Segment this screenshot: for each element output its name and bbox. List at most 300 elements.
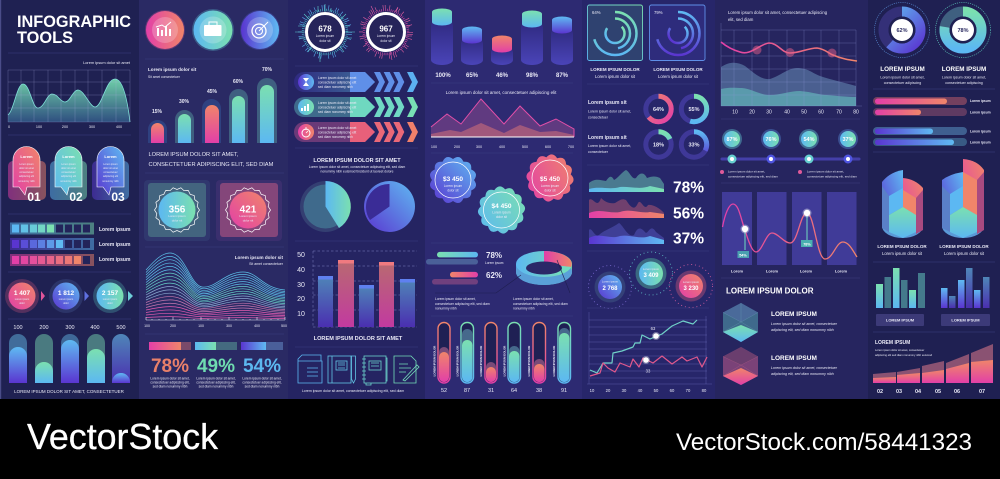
area chart: 0 (8, 125, 10, 129)
text block: LOREM IPSUM DOLOR SIT AMET, (148, 152, 239, 158)
donut captions: consectetuer adipiscing (884, 81, 921, 85)
circle stat 2 768: Lorem ipsum (602, 280, 619, 284)
donut captions: Lorem ipsum dolor sit amet, (880, 76, 925, 80)
legend: consectetuer adipiscing elit, sed diam (807, 174, 857, 178)
mountain chart: 400 (499, 145, 505, 149)
line chart: 20 (606, 388, 611, 393)
cylinder captions: Lorem ipsum dolor sit (944, 251, 985, 256)
capsule bar chart with percentages: 30% (179, 99, 190, 105)
capsule bar chart with percentages (148, 67, 277, 143)
thermometer tubes: LOREM IPSUM DOLOR (479, 346, 483, 376)
grid area chart: 30 (766, 110, 772, 116)
section heading: Lorem ipsum dolor sit amet, consectetuer adipiscing elit, sed diam (309, 165, 405, 169)
donut text top: consectetuer (588, 116, 609, 120)
text block one: adipiscing elit, sed diam nonummy nibh (771, 328, 834, 332)
capsule bar chart with percentages: Sit amet consectetuer (148, 75, 181, 79)
arc card captions (590, 67, 703, 79)
badge $3 450: $3 450 (443, 176, 463, 183)
callout 03: consectetuer (103, 171, 118, 174)
hexagon cube pink (723, 347, 758, 385)
column curve chart: Lorem (766, 268, 779, 274)
icon: briefcase (192, 9, 234, 51)
callout 01: 01 (27, 190, 41, 204)
capsule bar chart with percentages: 70% (262, 67, 273, 73)
text block two: Lorem ipsum dolor sit amet, consectetuer (771, 366, 838, 370)
callout 03: nonummy nibh (102, 180, 119, 183)
capsule bars: 500 (116, 325, 126, 331)
radial counter 967: dolor sit (380, 39, 392, 43)
callout 03: 03 (111, 190, 125, 204)
donut captions: consectetuer adipiscing (945, 81, 983, 85)
callout 02: Lorem (62, 154, 75, 159)
arrow row: chart: consectetuer adipiscing elit (318, 106, 356, 110)
thermometer tubes: 91 (561, 388, 567, 394)
horizontal progress bars: Lorem ipsum (970, 140, 991, 144)
wave line chart: Sit amet consectetuer (249, 262, 284, 266)
panel: column four (425, 0, 582, 399)
mini area 56%: 56% (673, 206, 704, 222)
mini bars right (941, 268, 990, 326)
circle counters: 1 812 (58, 290, 75, 297)
icon: document and pen (394, 356, 419, 383)
radial counter 678: 678 (318, 24, 332, 34)
callout 01: adipiscing elit (19, 175, 34, 178)
thermometer tubes: 38 (536, 388, 542, 394)
card 356: dolor sit (172, 218, 182, 222)
mini area 78% (589, 170, 704, 196)
callout 01: Lorem ipsum (19, 163, 34, 166)
stepped area chart (873, 340, 993, 395)
text block (148, 152, 274, 168)
wave line chart: 400 (254, 324, 260, 328)
circle stat 3 409 (630, 252, 672, 295)
card 421: dolor sit (243, 218, 253, 222)
radial counter 967 (361, 6, 412, 60)
capsule bars: 300 (65, 325, 75, 331)
line chart: 10 (590, 388, 595, 393)
circle counters: 1 407 (14, 290, 31, 297)
mountain chart: Lorem ipsum dolor sit amet, consectetuer adipiscing elit (446, 90, 557, 95)
donut 64%: 64% (653, 107, 664, 113)
column curve chart: 54% (739, 253, 747, 257)
radial counter 678 (295, 4, 355, 62)
circle stat 3 230 (670, 264, 712, 308)
mountain chart: 600 (545, 145, 551, 149)
line chart: 63 (651, 326, 656, 331)
capsule bar chart with percentages: 15% (152, 109, 163, 115)
legend: Lorem ipsum dolor sit amet, (728, 170, 765, 174)
stepped area chart: Lorem ipsum dolor sit amet, consectetuer (875, 348, 924, 352)
ring captions: Lorem ipsum dolor sit amet, (513, 297, 554, 301)
ring captions: nonummy nibh (513, 306, 535, 310)
mountain chart: 200 (454, 145, 460, 149)
legend: Lorem ipsum dolor sit amet, (807, 170, 844, 174)
mountain chart (431, 90, 574, 149)
stat 78%: Lorem ipsum dolor sit amet, (150, 376, 190, 380)
panel: column five (582, 0, 715, 399)
capsule bars (9, 325, 130, 394)
panel: column seven (868, 0, 1000, 399)
badge $4 450: dolor sit (496, 215, 507, 219)
stat 78%: consectetuer adipiscing elit, (150, 380, 190, 384)
arc card 79%: 79% (654, 10, 663, 15)
wave line chart: 200 (170, 324, 176, 328)
bar chart: 10 (297, 311, 305, 318)
callout 02: dolor sit amet (61, 167, 76, 170)
mountain chart: 500 (522, 145, 528, 149)
badge $3 450: dolor sit (447, 188, 459, 192)
grid area chart: Lorem ipsum dolor sit amet, consectetuer adipiscing (728, 10, 828, 15)
cylinders chart: 46% (496, 73, 509, 79)
radial counter 678: dolor sit (319, 39, 331, 43)
bar chart: 30 (297, 282, 305, 289)
segmented level bars: Lorem ipsum (99, 257, 131, 263)
arrow row: chart: sed diam nonummy nibh (318, 110, 353, 114)
donut text top: Lorem ipsum sit (588, 100, 627, 106)
grid area chart: 20 (749, 110, 755, 116)
donut 62% (874, 2, 930, 58)
cylinders chart: 65% (466, 73, 479, 79)
section heading: LOREM IPSUM DOLOR SIT AMET (313, 158, 401, 164)
callout 02: nonummy nibh (60, 180, 77, 183)
donut text top: Lorem ipsum dolor sit amet, (588, 110, 631, 114)
column curve chart: Lorem (835, 268, 848, 274)
line chart: 40 (638, 388, 643, 393)
3D cylinder chart right (942, 159, 984, 238)
capsule bars: 200 (39, 325, 49, 331)
icon: notebook and pencil (328, 356, 356, 383)
hexagon cube teal (723, 303, 758, 342)
callout 03: Lorem ipsum (103, 163, 118, 166)
arrow row: chart: Lorem ipsum dolor sit amet (318, 101, 357, 105)
circle counters: dolor (107, 302, 113, 305)
cylinders chart (431, 9, 573, 79)
panel: charts column two (139, 0, 288, 399)
section heading: LOREM IPSUM DOLOR (726, 286, 814, 296)
card 421 (216, 180, 282, 241)
stepped area chart: 02 (877, 389, 883, 395)
timeline percentages: 54% (803, 137, 815, 143)
wave line chart: 100 (198, 324, 204, 328)
callout 02 (50, 146, 87, 204)
horizontal progress bars: Lorem ipsum (970, 110, 991, 114)
bar chart: 50 (297, 252, 305, 259)
circle counters (5, 279, 133, 313)
horizontal progress bars: Lorem ipsum (970, 99, 991, 103)
donut 33% (681, 132, 707, 157)
stepped area chart: 05 (935, 389, 941, 395)
donut 18%: 18% (653, 142, 664, 148)
arc card captions: LOREM IPSUM DOLOR (590, 67, 640, 72)
stepped area chart: 03 (896, 389, 902, 395)
caption: Lorem ipsum dolor sit amet, consectetuer adipiscing elit, sed diam (302, 389, 404, 393)
callout 01: consectetuer (19, 171, 34, 174)
ring captions: nonummy nibh (435, 306, 457, 310)
column curve chart (722, 192, 857, 274)
mini area 37% (589, 223, 704, 248)
circle counters: dolor (63, 302, 69, 305)
3D ring chart (435, 251, 572, 293)
legend: consectetuer adipiscing elit, sed diam (728, 174, 778, 178)
bar chart: LOREM IPSUM DOLOR SIT AMET (314, 336, 403, 342)
line chart: 50 (654, 388, 659, 393)
circle counters: dolor (19, 302, 25, 305)
grid area chart: 60 (818, 110, 824, 116)
cylinder captions (877, 244, 989, 256)
mountain chart: 700 (568, 145, 574, 149)
card 356: Lorem ipsum (168, 214, 186, 218)
icon: target (240, 10, 280, 50)
section heading (309, 158, 405, 174)
text block one: Lorem ipsum dolor sit amet, consectetuer (771, 322, 838, 326)
donut 78% (936, 2, 990, 58)
grid area chart: 50 (801, 110, 807, 116)
icon: book (298, 355, 322, 383)
thermometer tubes: 31 (488, 388, 494, 394)
grid area chart (721, 10, 862, 116)
grid area chart: 10 (732, 110, 738, 116)
badge $5 450: Lorem ipsum (541, 184, 560, 188)
thermometer tubes: 52 (441, 388, 447, 394)
donut captions: LOREM IPSUM (942, 66, 986, 73)
stat 78%: 78% (151, 356, 189, 377)
mini area 78%: 78% (673, 180, 704, 196)
arrow row: stopwatch: consectetuer adipiscing elit (318, 130, 356, 134)
progress pills: 62% (486, 271, 502, 280)
card 421: Lorem ipsum (239, 214, 257, 218)
footer url: VectorStock.com/58441323 (676, 429, 972, 456)
stat 54%: consectetuer adipiscing elit, (242, 380, 282, 384)
mini bars left (876, 268, 925, 326)
callout 01 (8, 146, 46, 204)
donut captions: LOREM IPSUM (880, 66, 925, 73)
panel: column six (715, 0, 868, 399)
progress pills: Lorem ipsum (485, 261, 504, 265)
thermometer tubes: 64 (511, 388, 517, 394)
circle stat 2 768 (588, 266, 632, 308)
stepped area chart: 07 (979, 389, 985, 395)
callout 03: Lorem (104, 154, 117, 159)
stat 54%: Lorem ipsum dolor sit amet, (242, 376, 282, 380)
arrow row: hourglass: consectetuer adipiscing elit (318, 80, 356, 84)
callout 01: dolor sit amet (19, 167, 34, 170)
donut captions: Lorem ipsum dolor sit amet, (942, 76, 986, 80)
thermometer tubes: 87 (464, 388, 470, 394)
stat 54% (241, 342, 283, 388)
segmented level bars: Lorem ipsum (99, 242, 131, 248)
text block one: LOREM IPSUM (771, 311, 817, 318)
bar chart (297, 251, 417, 342)
bar chart: 20 (297, 296, 305, 303)
grid area chart: 40 (784, 110, 790, 116)
stepped area chart: 06 (954, 389, 960, 395)
arc card captions: Lorem ipsum dolor sit (595, 74, 636, 79)
circle stat 3 409: Lorem ipsum (643, 267, 660, 271)
icon: chart (145, 10, 185, 50)
radial counter 967: 967 (379, 24, 393, 34)
capsule bar chart with percentages: Lorem ipsum dolor sit (148, 67, 197, 72)
mini bars left: LOREM IPSUM (886, 318, 915, 323)
title (17, 13, 131, 47)
badge $4 450: $4 450 (492, 203, 512, 210)
timeline percentages (722, 129, 859, 164)
segmented level bars: Lorem ipsum (99, 227, 131, 233)
segmented level bars (10, 222, 131, 266)
cylinders chart: 98% (526, 73, 539, 79)
circle stat 3 230: 3 230 (683, 286, 699, 292)
donut text bottom: Lorem ipsum dolor sit amet, (588, 144, 631, 148)
callout 01: nonummy nibh (18, 180, 35, 183)
cylinders chart: 100% (435, 73, 451, 79)
arrow row: stopwatch: sed diam nonummy nibh (318, 135, 353, 139)
line chart (587, 312, 712, 393)
arc card captions: LOREM IPSUM DOLOR (653, 67, 703, 72)
wave line chart: 500 (281, 324, 287, 328)
timeline percentages: 76% (765, 137, 777, 143)
column curve chart: 78% (803, 242, 811, 246)
donut text bottom: Lorem ipsum sit (588, 135, 627, 141)
horizontal progress bars (873, 97, 991, 146)
radial counter 967: Lorem ipsum (377, 34, 396, 38)
column curve chart: Lorem (731, 268, 744, 274)
line chart: 30 (622, 388, 627, 393)
grid area chart: elit, sed diam (728, 17, 754, 22)
stat 54%: sed diam nonummy nibh (245, 384, 280, 388)
line chart: 80 (702, 388, 707, 393)
line chart: 33 (646, 368, 651, 374)
footer background (0, 399, 1000, 479)
donut 62%: 62% (896, 28, 908, 34)
text block one (771, 311, 838, 332)
arc card 64% (588, 5, 642, 60)
text block: CONSECTETUER ADIPISCING ELIT, SED DIAM (148, 162, 274, 168)
horizontal progress bars: Lorem ipsum (970, 130, 991, 134)
grid area chart: 70 (836, 110, 842, 116)
callout 03: adipiscing elit (103, 175, 118, 178)
panel: column three (288, 0, 425, 399)
donut text bottom (588, 135, 631, 154)
panel: title and area chart column (0, 0, 139, 399)
thermometer tubes: LOREM IPSUM DOLOR (527, 346, 531, 376)
capsule bar chart with percentages: 60% (233, 79, 244, 85)
donut 78%: 78% (957, 28, 969, 34)
stepped area chart: 04 (915, 389, 922, 395)
donut 64% (646, 96, 671, 122)
thermometer tubes: LOREM IPSUM DOLOR (432, 346, 436, 376)
text block two (771, 355, 838, 376)
progress pills: 78% (486, 251, 502, 260)
donut 18% (646, 132, 671, 157)
callout 02: Lorem ipsum (61, 163, 76, 166)
circle counters: Lorem ipsum (15, 298, 29, 301)
circle stat 3 230: Lorem ipsum (683, 280, 700, 284)
circle counters: 2 157 (102, 290, 119, 297)
area chart: 200 (62, 125, 68, 129)
circle stat 2 768: 2 768 (602, 286, 618, 292)
stat 49%: consectetuer adipiscing elit, (196, 380, 236, 384)
arc card 79% (650, 5, 705, 60)
stat 78%: sed diam nonummy nibh (153, 384, 188, 388)
mini area 37%: 37% (673, 230, 704, 248)
wave line chart: 100 (144, 324, 150, 328)
badge $3 450 (430, 157, 476, 203)
badge $3 450: Lorem ipsum (444, 184, 463, 188)
section heading: nonummy nibh euismod tincidunt ut laoreet dolore (321, 170, 394, 174)
mini area 56% (589, 198, 704, 222)
area chart: 300 (89, 125, 95, 129)
donut captions (880, 66, 986, 85)
capsule bars: 400 (90, 325, 100, 331)
text block two: LOREM IPSUM (771, 355, 817, 362)
arrow row: stopwatch: Lorem ipsum dolor sit amet (318, 126, 357, 130)
donut 55% (681, 96, 707, 122)
badge $5 450: $5 450 (540, 176, 560, 183)
callout 02: consectetuer (61, 171, 76, 174)
callout 02: adipiscing elit (61, 175, 76, 178)
stat 49%: sed diam nonummy nibh (199, 384, 234, 388)
capsule bars: 100 (13, 325, 23, 331)
stat 78% (149, 342, 191, 388)
circle stat 3 409: 3 409 (643, 273, 659, 279)
mountain chart: 100 (431, 145, 437, 149)
badge $5 450: dolor sit (544, 188, 556, 192)
area chart (8, 60, 131, 129)
circle counters: Lorem ipsum (103, 298, 117, 301)
card 421: 421 (240, 204, 257, 216)
arrow row: hourglass: Lorem ipsum dolor sit amet (318, 76, 357, 80)
ring captions: consectetuer adipiscing elit, sed diam (513, 302, 568, 306)
title: TOOLS (17, 29, 73, 47)
wave line chart: Lorem ipsum dolor sit (235, 255, 283, 260)
thermometer tubes: LOREM IPSUM DOLOR (552, 346, 556, 376)
text block two: adipiscing elit, sed diam nonummy nibh (771, 372, 834, 376)
area chart: 100 (36, 125, 42, 129)
thermometer tubes (432, 322, 570, 394)
title: INFOGRAPHIC (17, 13, 131, 31)
arc card 64%: 64% (592, 10, 601, 15)
cylinder captions: Lorem ipsum dolor sit (882, 251, 923, 256)
line chart: 70 (686, 388, 691, 393)
arrow row: hourglass (294, 72, 418, 92)
pie chart teal (300, 181, 351, 232)
badge $4 450: Lorem ipsum (492, 210, 511, 214)
pie chart purple (364, 181, 415, 232)
callout 03 (92, 146, 129, 204)
ring captions (435, 297, 568, 310)
wave line chart: 300 (226, 324, 232, 328)
stat 54%: 54% (243, 356, 281, 377)
callout 01: Lorem (20, 154, 33, 159)
stepped area chart: adipiscing elit sed diam nonummy nibh euismod (875, 353, 933, 357)
badge $5 450 (521, 149, 579, 207)
icon: spiral notebook (362, 356, 387, 385)
area chart: 400 (116, 125, 122, 129)
radial counter 678: Lorem ipsum (316, 34, 335, 38)
donut text bottom: consectetuer (588, 150, 609, 154)
ring captions: consectetuer adipiscing elit, sed diam (435, 302, 490, 306)
cylinders chart: 87% (556, 73, 569, 79)
progress pills (426, 251, 504, 284)
arrow row: hourglass: sed diam nonummy nibh (318, 85, 353, 89)
wave line chart (144, 253, 287, 328)
arc card captions: Lorem ipsum dolor sit (658, 74, 699, 79)
cylinder captions: LOREM IPSUM DOLOR (877, 244, 927, 249)
capsule bars: LOREM IPSUM DOLOR SIT AMET, CONSECTETUER (14, 389, 125, 394)
callout 02: 02 (69, 190, 83, 204)
stat 49%: 49% (197, 356, 235, 377)
thermometer tubes: LOREM IPSUM DOLOR (456, 346, 460, 376)
stepped area chart: LOREM IPSUM (875, 340, 910, 346)
